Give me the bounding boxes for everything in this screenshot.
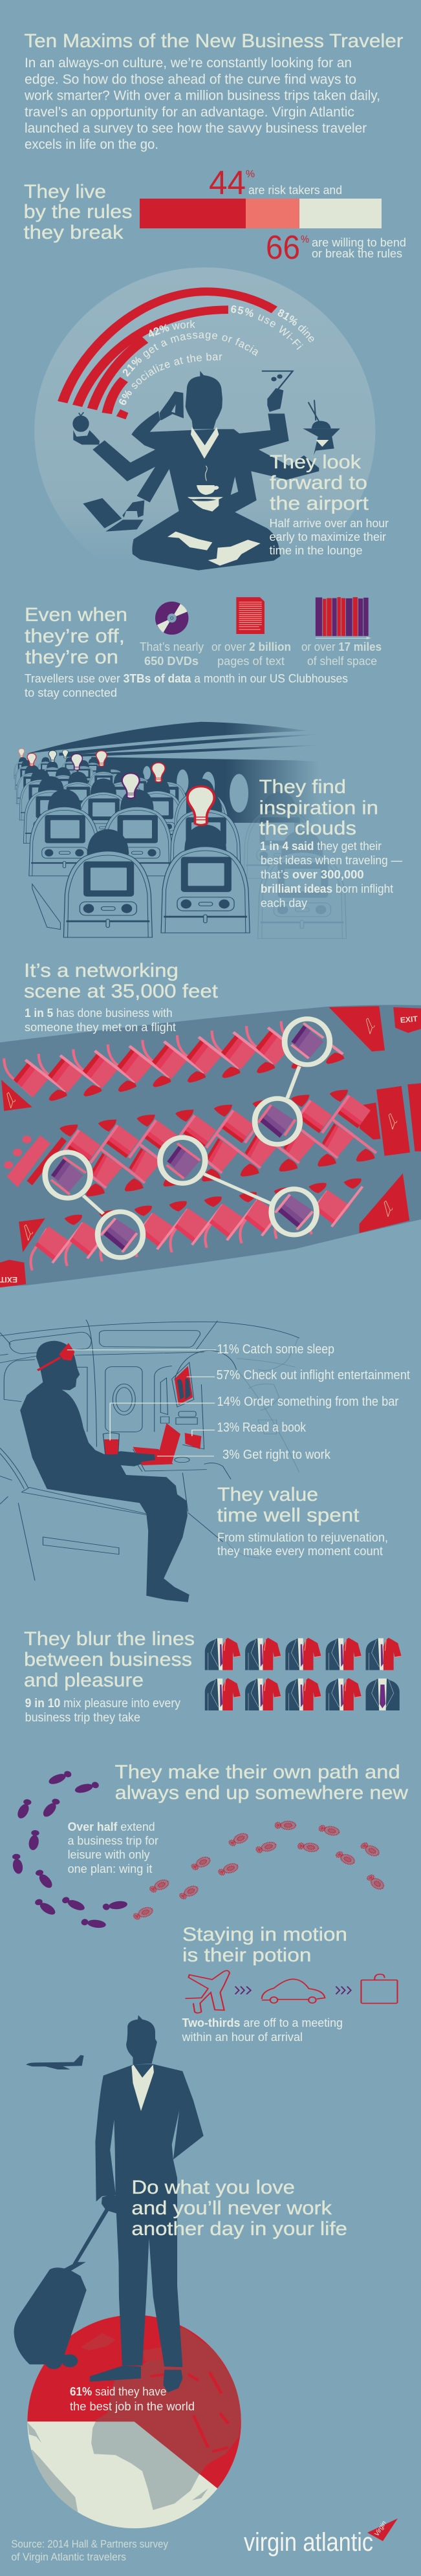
body text: 9 in 10 mix pleasure into every <box>25 1697 180 1710</box>
lightbulbs <box>19 748 214 825</box>
exit labels: EXIT <box>0 1275 17 1284</box>
closing heading: another day in your life <box>131 2218 347 2240</box>
closing heading: and you’ll never work <box>131 2198 332 2219</box>
heading: They value <box>217 1484 318 1505</box>
source note: Source: 2014 Hall & Partners survey <box>11 2538 168 2550</box>
activity stats: 13% Read a book <box>217 1421 307 1435</box>
heading: by the rules <box>23 201 132 223</box>
stat: best job in the world: the best job in the world <box>70 2400 195 2413</box>
stat: 66 percent: 66 <box>266 229 300 267</box>
stat: shelf space <box>301 640 382 668</box>
stat: 66 percent <box>266 229 406 267</box>
body text: business trip they take <box>25 1711 140 1725</box>
seated traveler illustration <box>0 1320 299 1602</box>
body text <box>217 1531 388 1558</box>
heading: They blur the lines <box>24 1628 195 1650</box>
stat: best job in the world: 61% said they have <box>70 2385 166 2398</box>
heading <box>182 1924 347 1966</box>
stat: shelf space: of shelf space <box>307 655 377 668</box>
heading: the clouds <box>259 818 356 839</box>
purple footprints <box>11 1769 128 1929</box>
heading: inspiration in <box>259 797 378 819</box>
source note <box>11 2538 168 2563</box>
panel: they find inspiration in the clouds <box>14 722 402 939</box>
heading: they’re off, <box>25 626 125 647</box>
drink and martini glass <box>262 371 293 397</box>
stat: pages: pages of text <box>217 655 285 668</box>
panel: staying in motion <box>181 1924 397 2044</box>
body text: each day <box>261 897 307 910</box>
curved stat labels: 42% work <box>149 320 195 337</box>
body text: they make every moment count <box>217 1545 383 1558</box>
stat: DVDs <box>140 640 204 668</box>
lounge backdrop and radial bar chart <box>34 267 375 595</box>
heading <box>23 181 132 243</box>
body text: early to maximize their <box>269 530 386 543</box>
body text: 1 in 5 has done business with <box>25 1007 173 1020</box>
intro text: work smarter? With over a million business trips taken daily, <box>24 89 380 104</box>
panel: they live by the rules <box>23 164 406 267</box>
body text: Over half extend <box>68 1820 155 1833</box>
heading: time well spent <box>217 1505 360 1526</box>
body text: Travellers use over 3TBs of data a month in our US Clubhouses <box>25 672 348 685</box>
heading <box>115 1762 408 1804</box>
body text: brilliant ideas born inflight <box>261 882 393 895</box>
body text: leisure with only <box>68 1848 150 1861</box>
stat: pages <box>211 640 291 668</box>
exit labels <box>0 1014 418 1284</box>
body text: 1 in 4 said they get their <box>260 840 382 853</box>
heading <box>259 776 378 839</box>
closing heading <box>131 2177 347 2240</box>
body text <box>25 1697 180 1725</box>
curved stat labels <box>119 305 314 405</box>
intro text: excels in life on the go. <box>25 137 158 152</box>
body text: a business trip for <box>68 1835 158 1848</box>
title: Ten Maxims of the New Business Traveler <box>24 30 403 52</box>
heading: is their potion <box>182 1945 312 1966</box>
logo: virgin atlantic: virgin atlantic <box>244 2528 373 2557</box>
intro text: edge. So how do those ahead of the curve find ways to <box>25 72 356 87</box>
standing traveler with suitcase <box>14 2015 204 2392</box>
heading: forward to <box>270 472 367 494</box>
body text <box>25 1007 176 1034</box>
heading: scene at 35,000 feet <box>24 981 219 1002</box>
stat: shelf space: or over 17 miles <box>301 640 382 653</box>
body text: Half arrive over an hour <box>269 517 389 530</box>
heading: They live <box>24 181 106 202</box>
source note: of Virgin Atlantic travelers <box>11 2551 126 2563</box>
heading: and pleasure <box>24 1670 144 1691</box>
heading: It’s a networking <box>24 960 178 981</box>
heading <box>217 1484 360 1526</box>
heading: Even when <box>25 604 127 626</box>
intro text: In an always-on culture, we’re constantly looking for an <box>25 56 352 71</box>
callout leader lines <box>67 1350 216 1456</box>
intro text: launched a survey to see how the savvy business traveler <box>25 121 367 136</box>
pictogram: jackets and polos <box>205 1638 402 1710</box>
heading: always end up somewhere new <box>115 1782 408 1804</box>
body text <box>181 2016 343 2044</box>
body text <box>68 1820 158 1875</box>
body text: someone they met on a flight <box>25 1021 176 1034</box>
activity stats: 3% Get right to work <box>222 1448 331 1462</box>
small airplane silhouette <box>26 2055 84 2069</box>
curved stat labels: 81% dine <box>278 309 314 342</box>
body text: to stay connected <box>25 686 117 699</box>
body text: best ideas when traveling — <box>261 854 402 867</box>
stat: best job in the world <box>70 2385 195 2413</box>
stacked bar <box>140 199 382 228</box>
heading: Staying in motion <box>182 1924 347 1945</box>
stat: 44 percent: % <box>246 169 255 180</box>
activity stats: 14% Order something from the bar <box>217 1395 399 1409</box>
curved stat labels: 65% use Wi-Fi <box>231 305 303 350</box>
heading: they break <box>23 222 124 243</box>
panel: networking scene <box>0 960 421 1287</box>
heading: They look <box>270 452 362 473</box>
activity stats: 11% Catch some sleep <box>217 1342 334 1357</box>
closing heading: Do what you love <box>131 2177 295 2198</box>
heading: they’re on <box>25 647 118 668</box>
logo: virgin atlantic: Virgin <box>373 2520 388 2538</box>
stat: DVDs: That’s nearly <box>140 640 204 653</box>
stat: 66 percent: are willing to bend <box>312 236 406 249</box>
body text <box>25 672 348 699</box>
heading: They find <box>259 776 346 798</box>
heading <box>25 604 127 668</box>
stat: 66 percent: or break the rules <box>312 247 402 260</box>
activity stats <box>217 1342 410 1462</box>
body text: one plan: wing it <box>68 1862 152 1875</box>
cabin floor plan <box>0 1005 421 1287</box>
body text: time in the lounge <box>269 544 362 557</box>
intro text: travel’s an opportunity for an advantage. Virgin Atlantic <box>25 105 354 120</box>
heading <box>270 452 369 514</box>
body text: Two-thirds are off to a meeting <box>182 2016 343 2029</box>
panel: they make their own path <box>11 1762 408 1929</box>
body text <box>260 840 402 910</box>
stat: pages: or over 2 billion <box>211 640 291 653</box>
heading: They make their own path and <box>115 1762 400 1783</box>
connected passengers <box>45 1019 330 1258</box>
multi-armed traveler illustration <box>72 371 340 571</box>
cabin illustration <box>14 722 347 939</box>
body text: that’s over 300,000 <box>261 868 364 881</box>
stat: 66 percent: % <box>301 234 309 245</box>
panel: introduction <box>24 30 403 152</box>
exit labels: EXIT <box>400 1014 418 1025</box>
curved stat labels: 6% socialize at the bar <box>119 353 222 405</box>
panel: they blur the lines <box>24 1628 402 1725</box>
heading: between business <box>24 1649 192 1670</box>
body text: From stimulation to rejuvenation, <box>217 1531 388 1545</box>
globe pie chart <box>24 2311 244 2531</box>
middle seat rows <box>52 1090 376 1196</box>
icons: DVD, document, books <box>155 597 371 639</box>
panel: they look forward to the airport <box>34 268 389 571</box>
icons: plane, car, briefcase with chevrons <box>185 1970 397 2013</box>
stat: 44 percent: 44 <box>209 164 246 202</box>
panel: do what you love <box>14 2015 347 2531</box>
panel: they value time well spent <box>0 1320 410 1602</box>
intro text <box>24 56 380 152</box>
body text <box>269 517 389 557</box>
stat: 44 percent: are risk takers and <box>248 184 342 197</box>
curved stat labels: 21% get a massage or facial <box>123 333 258 377</box>
panel: even when they're off <box>25 597 382 699</box>
stat: DVDs: 650 DVDs <box>144 655 199 668</box>
heading <box>24 1628 195 1691</box>
stat: 44 percent <box>209 164 342 202</box>
heading: the airport <box>270 493 369 514</box>
body text: within an hour of arrival <box>181 2031 303 2044</box>
red boot prints <box>132 1821 386 1921</box>
heading <box>24 960 219 1002</box>
